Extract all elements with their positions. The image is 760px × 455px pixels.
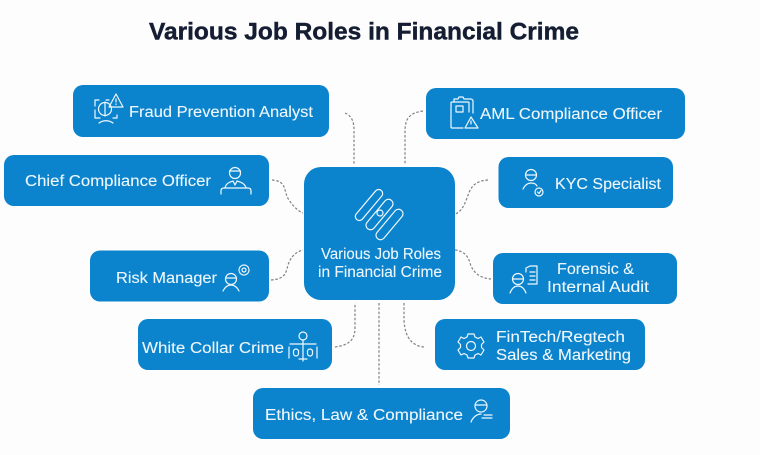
panel: Ethics, Law & Compliance <box>253 388 510 439</box>
label: Risk Manager <box>116 270 217 287</box>
label: AML Compliance Officer <box>480 106 662 123</box>
label: Fraud Prevention Analyst <box>129 104 314 121</box>
label: Various Job Roles <box>321 246 441 263</box>
label line 2: Sales & Marketing <box>496 347 631 364</box>
label: KYC Specialist <box>555 176 662 193</box>
label: FinTech/Regtech <box>496 329 625 346</box>
icon: person with clipboard <box>510 266 537 293</box>
icon: gear <box>458 334 484 358</box>
icon: fraud alert <box>95 94 123 123</box>
label line 2: in Financial Crime <box>318 264 442 281</box>
panel: AML Compliance Officer <box>426 88 685 139</box>
panel: central hub <box>304 167 455 300</box>
label line 2: Internal Audit <box>547 279 650 296</box>
label: Ethics, Law & Compliance <box>265 407 463 424</box>
icon: clipboard with alert <box>451 97 478 128</box>
label: White Collar Crime <box>142 340 284 357</box>
panel: KYC Specialist <box>498 157 673 208</box>
icon: officer at desk <box>221 168 251 194</box>
panel: Forensic & Internal Audit <box>493 253 677 304</box>
title: Various Job Roles in Financial Crime <box>149 18 579 46</box>
panel: Risk Manager <box>90 250 269 302</box>
icon: person with document <box>471 400 492 422</box>
icon: linked capsules <box>354 188 405 242</box>
connectors <box>271 111 491 385</box>
icon: person with gear <box>223 265 249 291</box>
label: Forensic & <box>557 261 635 278</box>
icon: person with scales <box>289 332 317 361</box>
panel: White Collar Crime <box>138 319 332 370</box>
panel: Chief Compliance Officer <box>4 155 269 206</box>
panel: Fraud Prevention Analyst <box>73 85 329 137</box>
panel: FinTech/Regtech Sales & Marketing <box>435 319 645 370</box>
label: Chief Compliance Officer <box>25 173 211 190</box>
icon: person with check <box>523 170 543 196</box>
